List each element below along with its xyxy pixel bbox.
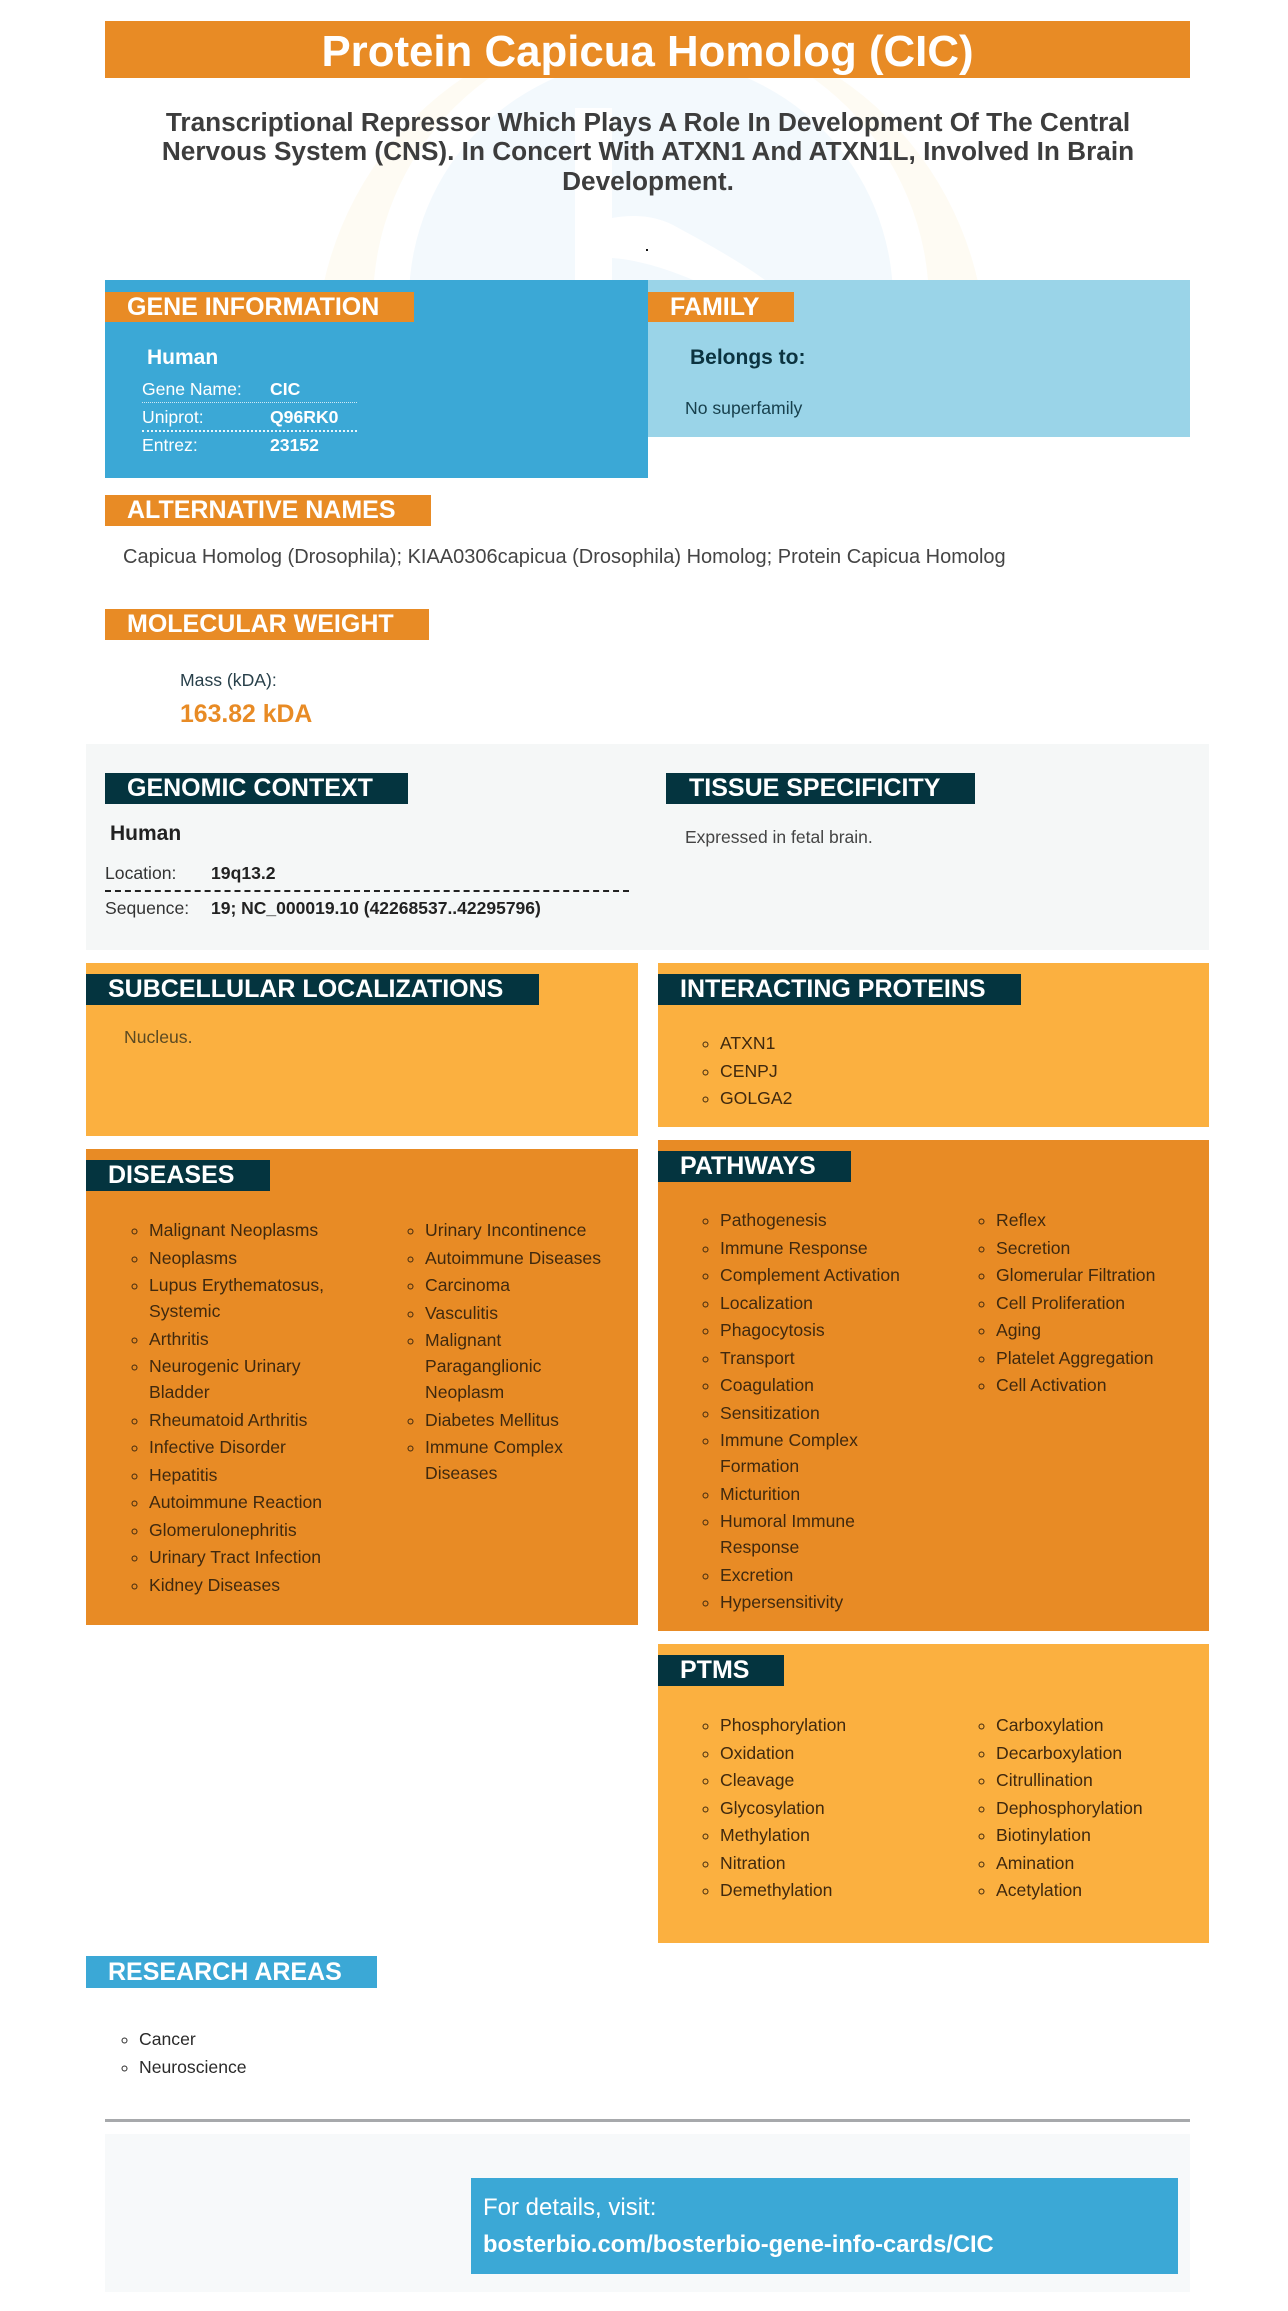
callout line 1: For details, visit: xyxy=(483,2194,656,2221)
ptms list column 2 xyxy=(978,1715,1143,1900)
heading: tissue specificity: TISSUE SPECIFICITY xyxy=(689,774,940,802)
ptms list column 2: Citrullination xyxy=(996,1770,1093,1790)
heading: family xyxy=(648,292,794,322)
ptms list column 1: Demethylation xyxy=(720,1880,832,1900)
diseases list column 2: Immune Complex xyxy=(425,1437,563,1457)
pathways list column 1: Transport xyxy=(720,1348,795,1368)
diseases list column 1: Autoimmune Reaction xyxy=(149,1492,322,1512)
ptms list column 1: Glycosylation xyxy=(720,1798,825,1818)
heading: diseases: DISEASES xyxy=(108,1161,234,1189)
diseases list column 1: Arthritis xyxy=(149,1328,209,1348)
watermark logo xyxy=(324,20,978,280)
callout link text: bosterbio.com/bosterbio-gene-info-cards/CIC xyxy=(483,2232,994,2258)
diseases list column 2: Diseases xyxy=(425,1463,497,1483)
diseases list column 2: Neoplasm xyxy=(425,1382,504,1402)
pathways list column 2: Glomerular Filtration xyxy=(996,1265,1155,1285)
diseases list column 2: Paraganglionic xyxy=(425,1356,541,1376)
panel: gene information xyxy=(105,280,648,478)
pathways list column 1: Sensitization xyxy=(720,1402,820,1422)
heading: diseases xyxy=(86,1160,270,1191)
pathways list column 1: Immune Response xyxy=(720,1238,868,1258)
small dot xyxy=(646,249,648,251)
heading: molecular weight: MOLECULAR WEIGHT xyxy=(127,610,394,638)
interacting proteins list: CENPJ xyxy=(720,1060,778,1080)
mass value: 163.82 kDA xyxy=(180,701,312,728)
diseases list column 2 xyxy=(408,1220,601,1483)
ptms list column 2: Decarboxylation xyxy=(996,1742,1122,1762)
research areas list xyxy=(122,2029,247,2076)
entrez row xyxy=(142,435,319,455)
ptms list column 2: Acetylation xyxy=(996,1880,1082,1900)
localization text: Nucleus. xyxy=(124,1027,192,1047)
location row: Location: xyxy=(105,863,176,883)
diseases list column 1: Glomerulonephritis xyxy=(149,1520,297,1540)
diseases list column 1: Kidney Diseases xyxy=(149,1574,280,1594)
diseases list column 1: Urinary Tract Infection xyxy=(149,1547,321,1567)
diseases list column 1: Bladder xyxy=(149,1382,210,1402)
panel: diseases xyxy=(86,1149,638,1625)
panel: subcellular localizations xyxy=(86,963,638,1136)
diseases list column 1 xyxy=(132,1220,324,1594)
diseases list column 2: Diabetes Mellitus xyxy=(425,1410,559,1430)
footer divider xyxy=(105,2119,1190,2122)
heading: gene information: GENE INFORMATION xyxy=(127,292,379,320)
pathways list column 1: Response xyxy=(720,1537,799,1557)
pathways list column 1: Coagulation xyxy=(720,1375,814,1395)
pathways list column 2: Platelet Aggregation xyxy=(996,1348,1153,1368)
belongs to label: Belongs to: xyxy=(690,346,806,369)
pathways list column 1: Pathogenesis xyxy=(720,1210,827,1230)
species label: Human xyxy=(110,822,181,845)
location row xyxy=(105,861,629,892)
pathways list column 2: Cell Activation xyxy=(996,1375,1107,1395)
tissue specificity text: Expressed in fetal brain. xyxy=(685,827,873,847)
family value: No superfamily xyxy=(685,398,802,418)
ptms list column 1: Methylation xyxy=(720,1825,810,1845)
species label: Human xyxy=(147,346,218,369)
ptms list column 2: Dephosphorylation xyxy=(996,1798,1143,1818)
panel: footer xyxy=(105,2134,1190,2292)
ptms list column 2: Amination xyxy=(996,1852,1074,1872)
uniprot row: Uniprot: xyxy=(142,407,204,427)
sequence row: 19; NC_000019.10 (42268537..42295796) xyxy=(211,898,541,918)
diseases list column 1: Malignant Neoplasms xyxy=(149,1220,318,1240)
uniprot row: Q96RK0 xyxy=(270,407,338,427)
diseases list column 2: Carcinoma xyxy=(425,1275,510,1295)
pathways list column 1: Complement Activation xyxy=(720,1265,900,1285)
location row: 19q13.2 xyxy=(211,863,276,883)
ptms list column 1: Cleavage xyxy=(720,1770,794,1790)
pathways list column 1 xyxy=(702,1210,900,1612)
ptms list column 1 xyxy=(702,1715,846,1900)
subtitle description: Transcriptional Repressor Which Plays A Role In Development Of The Central xyxy=(166,107,1130,137)
diseases list column 1: Hepatitis xyxy=(149,1464,217,1484)
diseases list column 1: Neoplasms xyxy=(149,1248,237,1268)
pathways list column 1: Excretion xyxy=(720,1564,793,1584)
research areas list: Cancer xyxy=(139,2029,196,2049)
heading: research areas: RESEARCH AREAS xyxy=(108,1958,342,1986)
uniprot row xyxy=(142,407,357,432)
panel: genomic context and tissue specificity xyxy=(86,744,1209,950)
title: Protein Capicua Homolog (CIC) xyxy=(321,27,974,76)
heading: ptms: PTMS xyxy=(680,1656,749,1684)
heading: genomic context: GENOMIC CONTEXT xyxy=(127,774,373,802)
pathways list column 1: Hypersensitivity xyxy=(720,1592,843,1612)
heading: subcellular localizations: SUBCELLULAR LOCALIZATIONS xyxy=(108,975,503,1003)
pathways list column 1: Micturition xyxy=(720,1484,800,1504)
entrez row: Entrez: xyxy=(142,435,198,455)
alternative names text: Capicua Homolog (Drosophila); KIAA0306capicua (Drosophila) Homolog; Protein Capicua Homolog xyxy=(123,546,1006,568)
callout: details link xyxy=(471,2178,1178,2274)
subtitle description: Nervous System (CNS). In Concert With ATXN1 And ATXN1L, Involved In Brain xyxy=(162,136,1134,166)
research areas list: Neuroscience xyxy=(139,2056,247,2076)
subtitle description: Development. xyxy=(562,166,734,196)
diseases list column 1: Systemic xyxy=(149,1301,220,1321)
diseases list column 1: Lupus Erythematosus, xyxy=(149,1275,324,1295)
ptms list column 1: Oxidation xyxy=(720,1742,794,1762)
diseases list column 1: Rheumatoid Arthritis xyxy=(149,1410,307,1430)
pathways list column 1: Immune Complex xyxy=(720,1430,858,1450)
pathways list column 1: Phagocytosis xyxy=(720,1320,825,1340)
mass label: Mass (kDA): xyxy=(180,670,277,690)
panel: family xyxy=(648,280,1190,437)
gene name row: CIC xyxy=(270,379,300,399)
ptms list column 2: Carboxylation xyxy=(996,1715,1104,1735)
pathways list column 1: Localization xyxy=(720,1292,813,1312)
interacting proteins list xyxy=(702,1033,792,1108)
heading: family: FAMILY xyxy=(670,292,759,320)
interacting proteins list: ATXN1 xyxy=(720,1033,775,1053)
ptms list column 2: Biotinylation xyxy=(996,1825,1091,1845)
panel: pathways xyxy=(658,1140,1209,1631)
heading: pathways: PATHWAYS xyxy=(680,1152,816,1180)
pathways list column 1: Formation xyxy=(720,1456,799,1476)
pathways list column 2: Aging xyxy=(996,1320,1041,1340)
ptms list column 1: Phosphorylation xyxy=(720,1715,846,1735)
interacting proteins list: GOLGA2 xyxy=(720,1088,792,1108)
title xyxy=(105,21,1190,78)
panel: ptms xyxy=(658,1644,1209,1943)
diseases list column 2: Malignant xyxy=(425,1330,501,1350)
pathways list column 1: Humoral Immune xyxy=(720,1511,855,1531)
sequence row: Sequence: xyxy=(105,898,189,918)
diseases list column 2: Urinary Incontinence xyxy=(425,1220,586,1240)
gene name row xyxy=(142,379,357,403)
entrez row: 23152 xyxy=(270,435,319,455)
subtitle description xyxy=(162,107,1134,196)
pathways list column 2 xyxy=(978,1210,1155,1395)
heading: pathways xyxy=(658,1151,851,1182)
diseases list column 2: Vasculitis xyxy=(425,1302,498,1322)
gene name row: Gene Name: xyxy=(142,379,242,399)
heading: ptms xyxy=(658,1655,784,1686)
heading: alternative names: ALTERNATIVE NAMES xyxy=(127,496,396,524)
panel: interacting proteins xyxy=(658,963,1209,1127)
diseases list column 1: Infective Disorder xyxy=(149,1437,286,1457)
ptms list column 1: Nitration xyxy=(720,1852,786,1872)
pathways list column 2: Reflex xyxy=(996,1210,1046,1230)
pathways list column 2: Secretion xyxy=(996,1238,1070,1258)
diseases list column 2: Autoimmune Diseases xyxy=(425,1248,601,1268)
pathways list column 2: Cell Proliferation xyxy=(996,1292,1125,1312)
heading: interacting proteins: INTERACTING PROTEINS xyxy=(680,975,986,1003)
diseases list column 1: Neurogenic Urinary xyxy=(149,1356,301,1376)
